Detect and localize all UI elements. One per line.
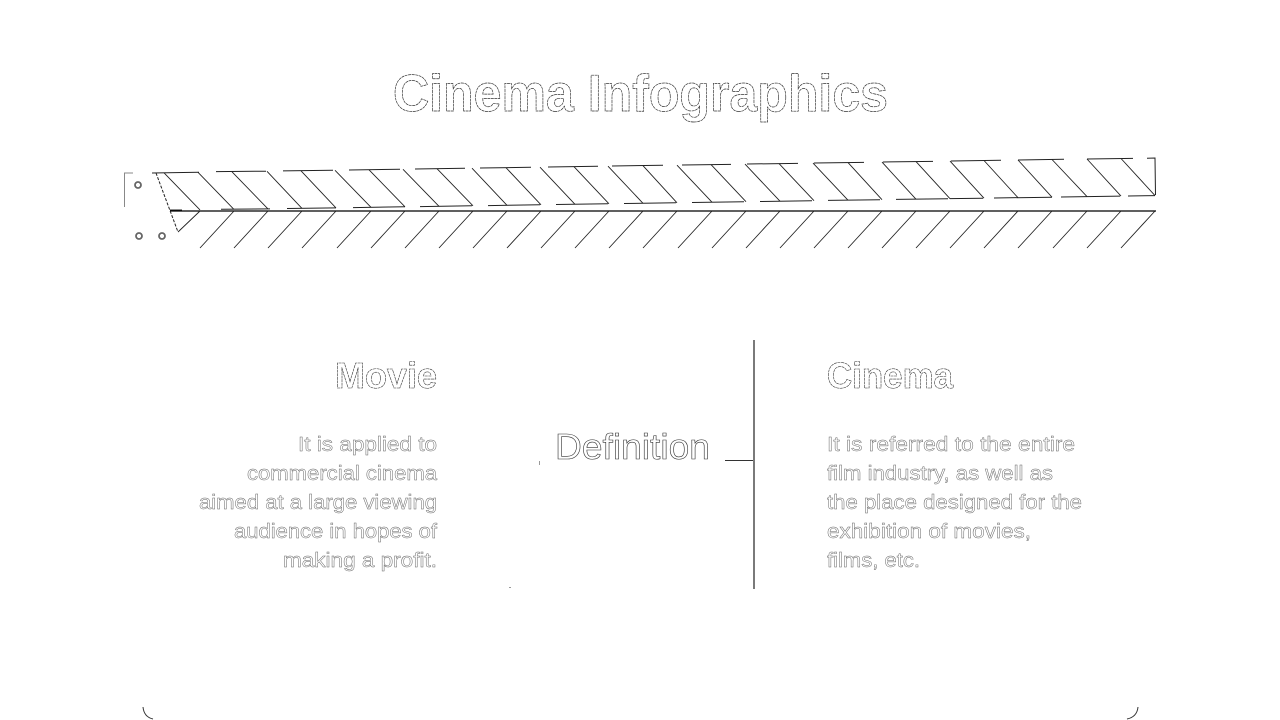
board lower stripes: [178, 211, 1155, 248]
text block: movie definition: aimed at a large viewing: [199, 492, 437, 514]
heading: cinema: Cinema: [827, 355, 954, 396]
panel: cinema: [827, 355, 1082, 572]
text block: movie definition: [199, 434, 438, 572]
clapper hinge wedge: [156, 173, 178, 232]
text block: movie definition: audience in hopes of: [234, 521, 437, 543]
clapper divider line: [170, 210, 1156, 212]
connector line: [725, 340, 754, 589]
icon: film clapperboard: [124, 158, 1156, 248]
left bracket: [124, 173, 133, 207]
text block: movie definition: making a profit.: [283, 550, 437, 572]
text block: movie definition: It is applied to: [298, 434, 437, 456]
title: Cinema Infographics: [393, 65, 888, 123]
panel: movie: [199, 355, 438, 572]
text block: cinema definition: film industry, as well as: [827, 463, 1053, 485]
bottom frame corners: [143, 707, 1138, 719]
text block: cinema definition: exhibition of movies,: [827, 521, 1031, 543]
clapper top edge: [152, 158, 1156, 195]
text block: cinema definition: films, etc.: [827, 550, 920, 572]
heading: definition: Definition: [555, 426, 710, 467]
clapper top stripes: [164, 158, 1155, 210]
heading: movie: Movie: [335, 355, 437, 396]
text block: movie definition: commercial cinema: [247, 463, 438, 485]
text block: cinema definition: [827, 434, 1082, 572]
text block: cinema definition: the place designed for the: [827, 492, 1082, 514]
stray marks: [509, 461, 540, 588]
clapper strip lower edge: [170, 196, 1155, 210]
text block: cinema definition: It is referred to the entire: [827, 434, 1075, 456]
clapper rivets: [135, 182, 165, 239]
